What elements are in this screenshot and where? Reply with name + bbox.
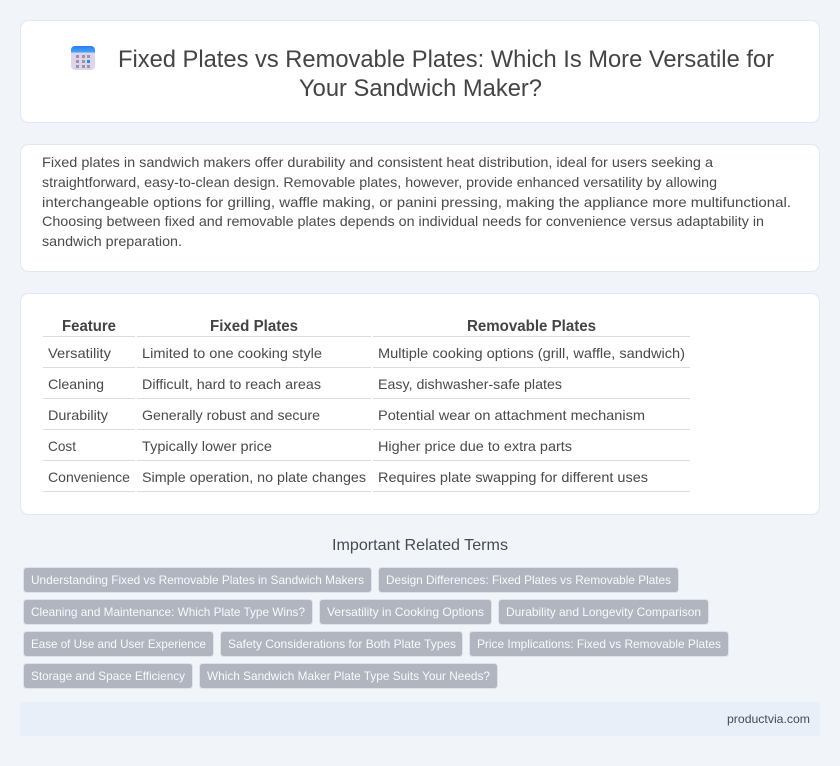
row: versatility: Versatility: [48, 345, 111, 361]
text block: introduction: Fixed plates in sandwich makers offer durability and consistent heat distribution, ideal for users seeking a: [42, 154, 713, 170]
row: durability: [48, 407, 645, 423]
row: versatility: [48, 345, 685, 361]
footer: productvia.com: [727, 712, 810, 726]
tags: related terms: Cleaning and Maintenance: Which Plate Type Wins?: [31, 605, 305, 619]
tags: related terms: [24, 568, 728, 688]
tags: related terms: Design Differences: Fixed Plates vs Removable Plates: [386, 573, 671, 587]
text block: introduction: Choosing between fixed and removable plates depends on individual needs for convenience versus adaptability in: [42, 213, 764, 229]
title: [118, 46, 774, 102]
row: convenience: [48, 469, 648, 485]
row: versatility: Multiple cooking options (grill, waffle, sandwich): [378, 345, 685, 361]
table header: [62, 318, 596, 335]
text block: introduction: interchangeable options for grilling, waffle making, or panini pressing, making the appliance more multifunctional.: [42, 194, 791, 210]
tags: related terms: Which Sandwich Maker Plate Type Suits Your Needs?: [207, 669, 490, 683]
table header: Fixed Plates: [210, 318, 298, 335]
text block: introduction: [42, 154, 791, 249]
icon: calendar: [71, 46, 95, 70]
footer: [20, 702, 820, 736]
title: Fixed Plates vs Removable Plates: Which Is More Versatile for: [118, 46, 774, 73]
row: cleaning: [48, 376, 562, 392]
tags: related terms: Versatility in Cooking Options: [327, 605, 484, 619]
row: cost: Cost: [48, 438, 76, 454]
panel: introduction: [20, 144, 820, 272]
row: cost: Typically lower price: [142, 438, 272, 454]
row: convenience: Requires plate swapping for different uses: [378, 469, 648, 485]
row: durability: Potential wear on attachment mechanism: [378, 407, 645, 423]
row: cleaning: Difficult, hard to reach areas: [142, 376, 321, 392]
row: durability: Generally robust and secure: [142, 407, 320, 423]
heading: related terms: Important Related Terms: [332, 537, 508, 554]
row: convenience: Simple operation, no plate changes: [142, 469, 366, 485]
tags: related terms: Storage and Space Efficiency: [31, 669, 185, 683]
row: versatility: Limited to one cooking style: [142, 345, 322, 361]
title: Your Sandwich Maker?: [299, 75, 542, 102]
row: cost: [48, 438, 572, 454]
row: cleaning: Easy, dishwasher-safe plates: [378, 376, 562, 392]
tags: related terms: Price Implications: Fixed vs Removable Plates: [477, 637, 721, 651]
row: cleaning: Cleaning: [48, 376, 104, 392]
tags: related terms: Durability and Longevity Comparison: [506, 605, 701, 619]
panel: header: [20, 20, 820, 122]
row: durability: Durability: [48, 407, 108, 423]
row: convenience: Convenience: [48, 469, 130, 485]
tags: related terms: Understanding Fixed vs Removable Plates in Sandwich Makers: [31, 573, 364, 587]
panel: comparison table: [20, 294, 820, 514]
text block: introduction: sandwich preparation.: [42, 233, 182, 249]
tags: related terms: Safety Considerations for Both Plate Types: [228, 637, 456, 651]
text block: introduction: straightforward, easy-to-clean design. Removable plates, however, provide enhanced versatility by allowing: [42, 174, 717, 190]
table header: Feature: [62, 318, 116, 335]
tags: related terms: Ease of Use and User Experience: [31, 637, 206, 651]
row: cost: Higher price due to extra parts: [378, 438, 572, 454]
table header: Removable Plates: [467, 318, 596, 335]
